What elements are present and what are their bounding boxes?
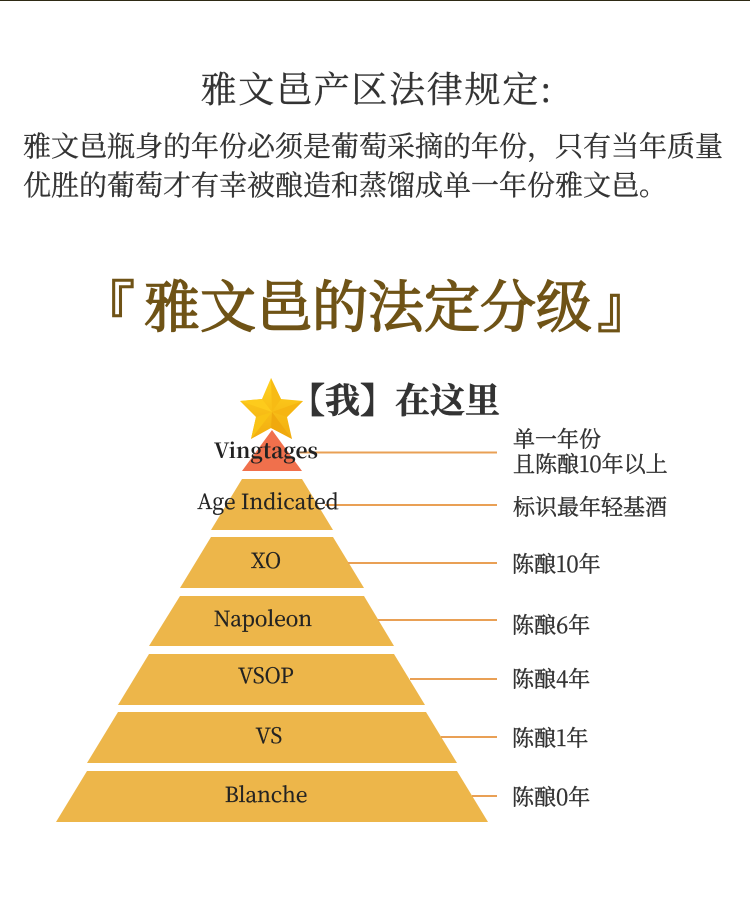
tier: VS — [87, 712, 497, 763]
tier: VS: VS — [256, 720, 282, 750]
tier: Blanche — [56, 771, 497, 822]
main title: 雅文邑的法定分级 — [144, 264, 592, 344]
labels: ageing requirements: 且陈酿10年以上 — [513, 448, 668, 479]
tier: Napoleon — [149, 596, 497, 646]
pyramid chart — [56, 430, 497, 822]
body paragraph — [23, 125, 723, 204]
body paragraph: 优胜的葡萄才有幸被酿造和蒸馏成单一年份雅文邑。 — [23, 164, 667, 204]
tier: VSOP — [118, 654, 497, 705]
main title: 』 — [597, 264, 653, 344]
icon: gold star — [240, 378, 303, 439]
tier: Vingtages: Vingtages — [214, 435, 318, 465]
labels: ageing requirements: 标识最年轻基酒 — [513, 491, 667, 522]
main title: 『 — [79, 264, 135, 344]
section heading: 雅文邑产区法律规定: — [201, 62, 553, 113]
tier: Vingtages — [214, 430, 497, 471]
labels: ageing requirements: 陈酿0年 — [512, 781, 590, 812]
labels: ageing requirements: 陈酿10年 — [512, 548, 601, 579]
top edge strip — [0, 0, 750, 1]
tier: Age Indicated — [197, 479, 497, 530]
tier: XO — [180, 537, 497, 588]
tier: Blanche: Blanche — [225, 779, 307, 809]
body paragraph: 雅文邑瓶身的年份必须是葡萄采摘的年份，只有当年质量 — [23, 125, 723, 165]
tier: Napoleon: Napoleon — [214, 603, 312, 633]
tier: XO: XO — [251, 545, 281, 575]
labels: ageing requirements: 陈酿6年 — [512, 609, 590, 640]
labels: ageing requirements: 陈酿1年 — [512, 722, 588, 753]
labels: ageing requirements — [512, 423, 668, 812]
labels: ageing requirements: 单一年份 — [513, 423, 601, 454]
labels: ageing requirements: 陈酿4年 — [512, 663, 590, 694]
tier: VSOP: VSOP — [238, 660, 294, 690]
tier: Age Indicated: Age Indicated — [197, 486, 339, 516]
here label: 【我】在这里 — [290, 374, 500, 424]
